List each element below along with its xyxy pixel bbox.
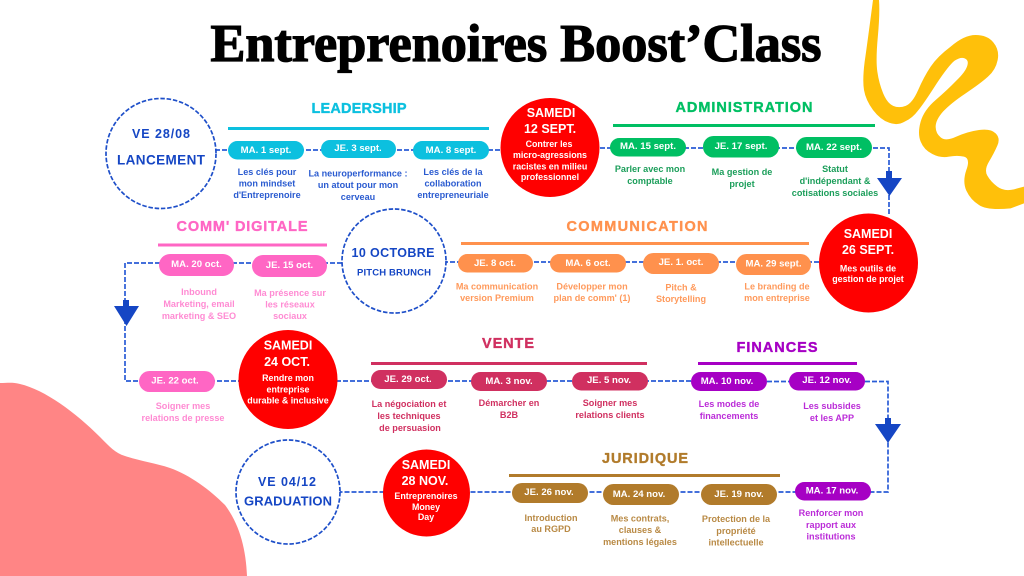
milestone: 10 octobre pitch brunch: PITCH BRUNCH: [357, 268, 431, 278]
session: JE. 29 oct.: JE. 29 oct.: [384, 374, 432, 385]
arrow: down to row 3: [114, 300, 139, 326]
session: MA. 10 nov.: [691, 372, 767, 421]
session: MA. 3 nov.: MA. 3 nov.: [485, 376, 533, 387]
session: MA. 10 nov.: financements: [700, 411, 758, 421]
milestone: graduation: VE 04/12: [258, 475, 316, 489]
section: vente: VENTE: [482, 336, 534, 352]
session: MA. 6 oct.: plan de comm' (1): [554, 293, 630, 303]
session: JE. 1. oct.: [643, 253, 719, 304]
session: MA. 17 nov.: institutions: [806, 532, 856, 542]
session: JE. 1. oct.: JE. 1. oct.: [659, 257, 703, 268]
session: MA. 1 sept.: d'Entreprenoire: [233, 190, 301, 200]
milestone: samedi 12 sept.: micro-agressions: [513, 150, 587, 160]
session: JE. 3 sept.: un atout pour mon: [318, 180, 398, 190]
session: MA. 24 nov.: MA. 24 nov.: [613, 489, 665, 500]
milestone: samedi 12 sept.: [500, 98, 600, 197]
milestone: samedi 28 nov.: Money: [412, 502, 440, 512]
session: JE. 17 sept.: JE. 17 sept.: [715, 141, 767, 152]
session: JE. 26 nov.: Introduction: [524, 513, 578, 523]
session: JE. 22 oct.: Soigner mes: [156, 401, 210, 411]
milestone: samedi 28 nov.: Day: [418, 512, 434, 522]
session: JE. 15 oct.: JE. 15 oct.: [266, 260, 313, 271]
session: JE. 19 nov.: [701, 484, 777, 548]
milestone: samedi 28 nov.: [383, 450, 470, 536]
milestone: samedi 24 oct.: entreprise: [267, 384, 310, 394]
session: JE. 3 sept.: [308, 140, 408, 202]
session: MA. 22 sept.: MA. 22 sept.: [806, 142, 862, 153]
session: MA. 22 sept.: cotisations sociales: [792, 188, 878, 198]
milestone: lancement: [106, 98, 216, 208]
section: communication: [456, 219, 811, 304]
section: leadership: [228, 101, 489, 202]
session: MA. 22 sept.: Statut: [822, 164, 848, 174]
session: MA. 29 sept.: [736, 254, 811, 303]
milestone: samedi 24 oct.: durable & inclusive: [247, 396, 329, 406]
session: MA. 15 sept.: Parler avec mon: [615, 164, 685, 174]
session: JE. 22 oct.: [139, 371, 224, 423]
session: MA. 1 sept.: MA. 1 sept.: [241, 145, 291, 156]
session: MA. 20 oct.: Inbound: [181, 287, 217, 297]
session: MA. 15 sept.: [610, 138, 686, 186]
session: JE. 19 nov.: propriété: [716, 526, 756, 536]
milestone: samedi 24 oct.: Rendre mon: [262, 373, 314, 383]
session: JE. 8 oct.: Ma communication: [456, 282, 538, 292]
session: MA. 1 sept.: mon mindset: [239, 178, 295, 188]
session: JE. 15 oct.: [252, 255, 327, 321]
milestone: samedi 26 sept.: gestion de projet: [832, 274, 904, 284]
session: JE. 17 sept.: projet: [729, 179, 755, 189]
session: JE. 26 nov.: au RGPD: [531, 524, 571, 534]
section: comm' digitale: [158, 219, 327, 321]
session: JE. 3 sept.: La neuroperformance :: [308, 168, 408, 178]
session: JE. 26 nov.: JE. 26 nov.: [524, 487, 574, 498]
milestone: samedi 24 oct.: SAMEDI: [264, 338, 312, 352]
session: JE. 12 nov.: Les subsides: [803, 401, 861, 411]
milestone: samedi 12 sept.: 12 SEPT.: [524, 122, 576, 136]
section: finances: FINANCES: [736, 340, 818, 356]
session: MA. 3 nov.: [471, 372, 547, 420]
session: MA. 17 nov.: MA. 17 nov.: [806, 486, 858, 496]
session: JE. 1. oct.: Storytelling: [656, 294, 706, 304]
milestone: graduation: [236, 440, 340, 544]
session: JE. 15 oct.: les réseaux: [265, 300, 315, 310]
session: JE. 12 nov.: et les APP: [810, 413, 854, 423]
section: juridique: [509, 451, 780, 548]
session: MA. 6 oct.: Développer mon: [556, 282, 628, 292]
session: JE. 5 nov.: [572, 372, 648, 420]
title: Entreprenoires Boost’Class: [210, 15, 822, 73]
session: JE. 17 sept.: [703, 136, 779, 189]
session: MA. 6 oct.: MA. 6 oct.: [565, 258, 611, 269]
section: juridique: JURIDIQUE: [602, 451, 688, 467]
session: MA. 20 oct.: Marketing, email: [163, 299, 235, 309]
arrow: down to row 4: [875, 418, 901, 443]
session: MA. 1 sept.: [228, 141, 304, 200]
milestone: samedi 26 sept.: Mes outils de: [840, 264, 896, 274]
session: JE. 8 oct.: JE. 8 oct.: [474, 258, 516, 269]
milestone: graduation: GRADUATION: [244, 494, 332, 508]
section: leadership: LEADERSHIP: [312, 101, 407, 117]
arrow: down to row 2: [877, 171, 902, 196]
session: JE. 12 nov.: [789, 372, 865, 423]
session: MA. 17 nov.: Renforcer mon: [799, 508, 863, 518]
session: JE. 15 oct.: Ma présence sur: [254, 288, 326, 298]
session: MA. 6 oct.: [550, 254, 630, 303]
milestone: samedi 26 sept.: SAMEDI: [844, 227, 892, 241]
session: JE. 29 oct.: [371, 370, 447, 433]
session: JE. 29 oct.: de persuasion: [379, 423, 441, 433]
session: JE. 8 oct.: [456, 254, 538, 303]
session: MA. 3 nov.: Démarcher en: [479, 398, 539, 408]
session: JE. 12 nov.: JE. 12 nov.: [802, 375, 852, 386]
session: MA. 24 nov.: mentions légales: [603, 537, 677, 547]
session: MA. 20 oct.: marketing & SEO: [162, 311, 236, 321]
session: MA. 3 nov.: B2B: [500, 410, 519, 420]
milestone: 10 octobre pitch brunch: 10 OCTOBRE: [352, 246, 434, 260]
section: vente: [371, 336, 648, 433]
session: MA. 17 nov.: [795, 482, 871, 542]
milestone: samedi 12 sept.: racistes en milieu: [513, 162, 587, 172]
session: MA. 20 oct.: [159, 254, 236, 321]
section: finances: [691, 340, 865, 423]
session: MA. 15 sept.: comptable: [627, 176, 673, 186]
session: MA. 17 nov.: rapport aux: [806, 520, 856, 530]
milestone: lancement: VE 28/08: [132, 127, 190, 141]
session: MA. 29 sept.: Le branding de: [744, 282, 810, 292]
session: JE. 22 oct.: relations de presse: [142, 413, 224, 423]
session: JE. 19 nov.: intellectuelle: [708, 538, 764, 548]
session: JE. 1. oct.: Pitch &: [665, 282, 697, 292]
session: MA. 22 sept.: d'indépendant &: [800, 176, 871, 186]
milestone: samedi 28 nov.: 28 NOV.: [402, 474, 448, 488]
milestone: samedi 12 sept.: Contrer les: [526, 139, 572, 149]
session: MA. 24 nov.: clauses &: [619, 525, 662, 535]
session: JE. 22 oct.: JE. 22 oct.: [151, 376, 199, 386]
milestone: lancement: LANCEMENT: [117, 152, 206, 168]
session: MA. 10 nov.: MA. 10 nov.: [701, 376, 753, 387]
session: MA. 8 sept.: MA. 8 sept.: [426, 145, 476, 156]
session: MA. 1 sept.: Les clés pour: [238, 167, 297, 177]
session: MA. 8 sept.: Les clés de la: [423, 167, 484, 177]
session: MA. 22 sept.: [792, 137, 878, 198]
session: JE. 3 sept.: cerveau: [341, 192, 375, 202]
session: JE. 8 oct.: version Premium: [460, 293, 534, 303]
session: MA. 8 sept.: [413, 141, 489, 200]
milestone: samedi 28 nov.: Entreprenoires: [394, 491, 458, 501]
session: JE. 3 sept.: JE. 3 sept.: [334, 143, 382, 154]
session: MA. 24 nov.: Mes contrats,: [611, 514, 669, 524]
session: JE. 5 nov.: relations clients: [575, 410, 645, 420]
session: JE. 19 nov.: JE. 19 nov.: [714, 489, 764, 500]
milestone: samedi 24 oct.: [238, 330, 338, 429]
section: administration: [610, 100, 878, 198]
session: MA. 15 sept.: MA. 15 sept.: [620, 141, 676, 152]
milestone: 10 octobre pitch brunch: [342, 209, 446, 313]
milestone: samedi 28 nov.: SAMEDI: [402, 458, 450, 472]
session: JE. 15 oct.: sociaux: [273, 311, 307, 321]
milestone: samedi 26 sept.: [819, 214, 918, 312]
section: comm' digitale: COMM' DIGITALE: [176, 219, 308, 235]
session: JE. 17 sept.: Ma gestion de: [712, 167, 772, 177]
session: MA. 24 nov.: [603, 484, 679, 547]
session: MA. 8 sept.: collaboration: [424, 178, 482, 188]
milestone: samedi 12 sept.: SAMEDI: [527, 106, 575, 120]
session: MA. 29 sept.: MA. 29 sept.: [746, 258, 801, 270]
timeline connector: dashed path through all rows: [125, 148, 889, 492]
session: MA. 29 sept.: mon entreprise: [744, 293, 810, 303]
session: JE. 26 nov.: [512, 483, 588, 534]
session: JE. 5 nov.: JE. 5 nov.: [587, 375, 631, 386]
session: MA. 10 nov.: Les modes de: [699, 399, 759, 409]
milestone: samedi 24 oct.: 24 OCT.: [264, 355, 310, 369]
session: JE. 19 nov.: Protection de la: [702, 514, 771, 524]
milestone: samedi 12 sept.: professionnel: [521, 172, 579, 182]
decorative coral blob: [0, 383, 247, 576]
milestone: samedi 26 sept.: 26 SEPT.: [842, 243, 894, 257]
decorative yellow squiggle: [863, 0, 1024, 209]
session: MA. 8 sept.: entrepreneuriale: [417, 190, 489, 200]
session: JE. 5 nov.: Soigner mes: [583, 398, 637, 408]
section: communication: COMMUNICATION: [566, 219, 708, 235]
session: JE. 29 oct.: les techniques: [377, 411, 441, 421]
section: administration: ADMINISTRATION: [676, 100, 812, 116]
session: MA. 20 oct.: MA. 20 oct.: [171, 259, 222, 270]
session: JE. 29 oct.: La négociation et: [372, 399, 446, 409]
